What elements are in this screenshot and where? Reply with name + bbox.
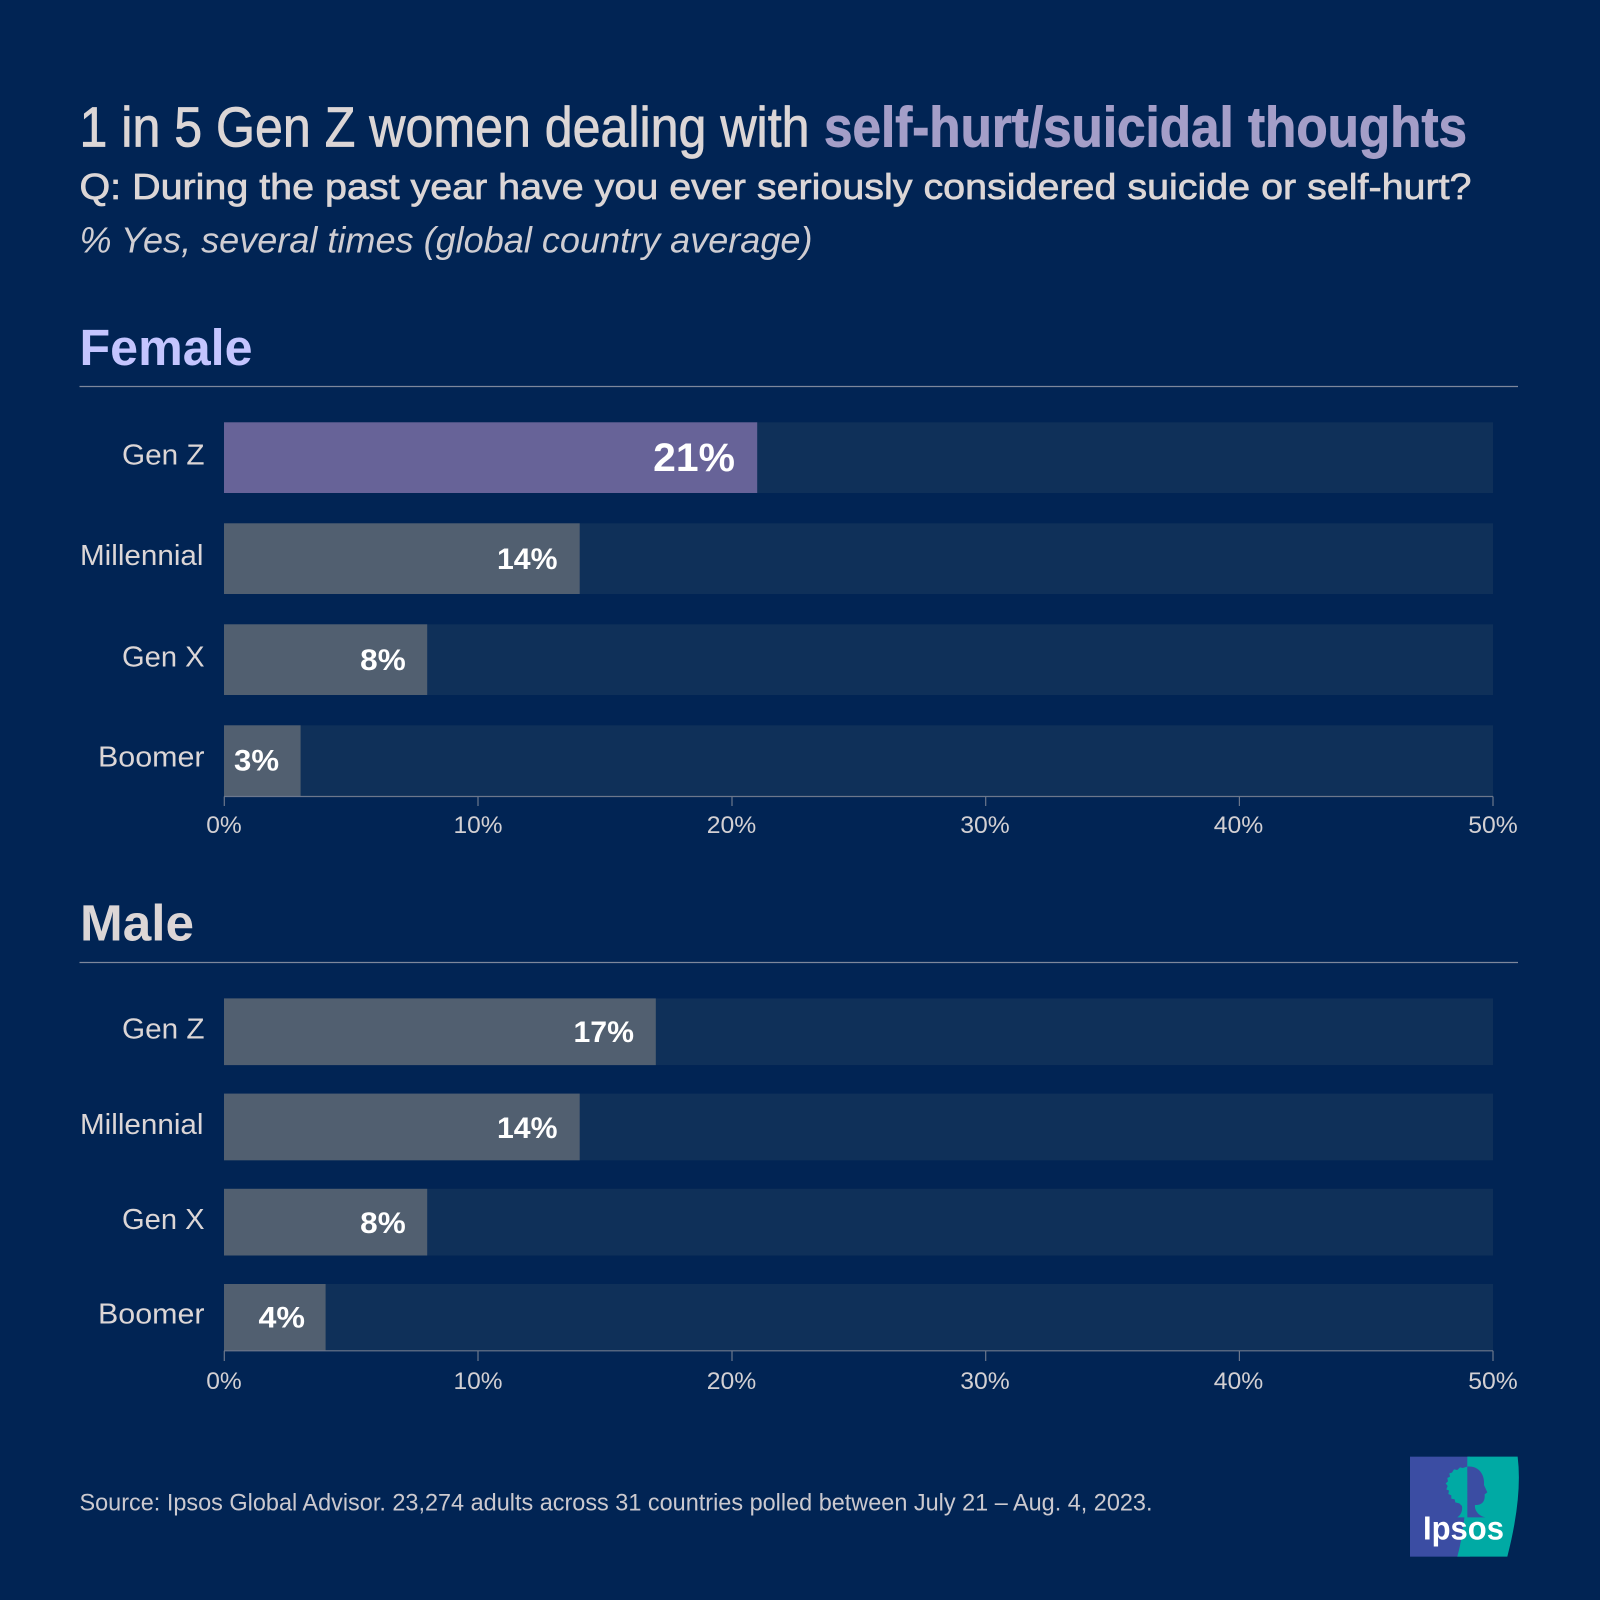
axis: male: 0% [206, 1368, 242, 1395]
axis: female: 0% [206, 812, 242, 839]
row: male Millennial: Millennial [80, 1109, 204, 1141]
panel: female [80, 319, 1518, 839]
row: female Millennial: Millennial [80, 540, 204, 572]
axis: female: 10% [454, 812, 502, 839]
row: female Boomer: 3% [234, 744, 279, 778]
row: female Gen Z [122, 422, 1493, 493]
row: female Gen X [122, 624, 1493, 695]
row: male Millennial [80, 1094, 1493, 1160]
axis: female: 20% [707, 812, 756, 839]
subtitle: measure note: % Yes, several times (global country average) [80, 220, 812, 261]
row: male Gen Z: Gen Z [122, 1014, 205, 1046]
row: female Millennial: 14% [497, 543, 558, 576]
axis: male [206, 1351, 1518, 1395]
row: male Gen X [122, 1189, 1493, 1256]
row: female Gen X: 8% [360, 644, 406, 677]
axis: male: 20% [707, 1368, 756, 1395]
axis: female [206, 796, 1518, 839]
row: male Boomer: 4% [258, 1302, 305, 1335]
title: self-hurt/suicidal thoughts [824, 96, 1467, 160]
axis: female: 40% [1214, 812, 1263, 839]
icon: Ipsos logo [1410, 1457, 1519, 1557]
row: female Boomer [98, 725, 1493, 796]
row: male Gen Z [122, 998, 1493, 1065]
source note: Source: Ipsos Global Advisor. 23,274 adults across 31 countries polled between July 21 – Aug. 4, 2023. [80, 1490, 1152, 1517]
panel: male [80, 895, 1518, 1395]
row: female Gen Z: 21% [653, 436, 735, 480]
row: male Gen X: 8% [360, 1207, 406, 1240]
row: female Gen Z: Gen Z [122, 439, 205, 471]
heading: male: Male [80, 895, 194, 952]
row: male Gen X: Gen X [122, 1204, 205, 1236]
row: male Millennial: 14% [497, 1112, 558, 1145]
title: 1 in 5 Gen Z women dealing with [80, 96, 810, 160]
axis: male: 10% [454, 1368, 502, 1395]
subtitle: question: Q: During the past year have you ever seriously considered suicide or self-hurt? [80, 166, 1472, 207]
row: male Gen Z: 17% [574, 1016, 634, 1049]
axis: male: 50% [1468, 1368, 1518, 1395]
row: male Boomer: Boomer [98, 1298, 205, 1330]
icon: Ipsos logo: Ipsos [1423, 1509, 1504, 1546]
row: female Millennial [80, 523, 1493, 594]
title [80, 96, 1467, 160]
row: male Boomer [98, 1284, 1493, 1351]
axis: male: 30% [960, 1368, 1010, 1395]
heading: female: Female [80, 319, 252, 376]
axis: female: 50% [1468, 812, 1518, 839]
axis: male: 40% [1214, 1368, 1263, 1395]
bar chart: male [80, 998, 1518, 1395]
bar chart: female [80, 422, 1518, 839]
row: female Gen X: Gen X [122, 642, 205, 674]
row: female Boomer: Boomer [98, 742, 205, 774]
axis: female: 30% [960, 812, 1010, 839]
